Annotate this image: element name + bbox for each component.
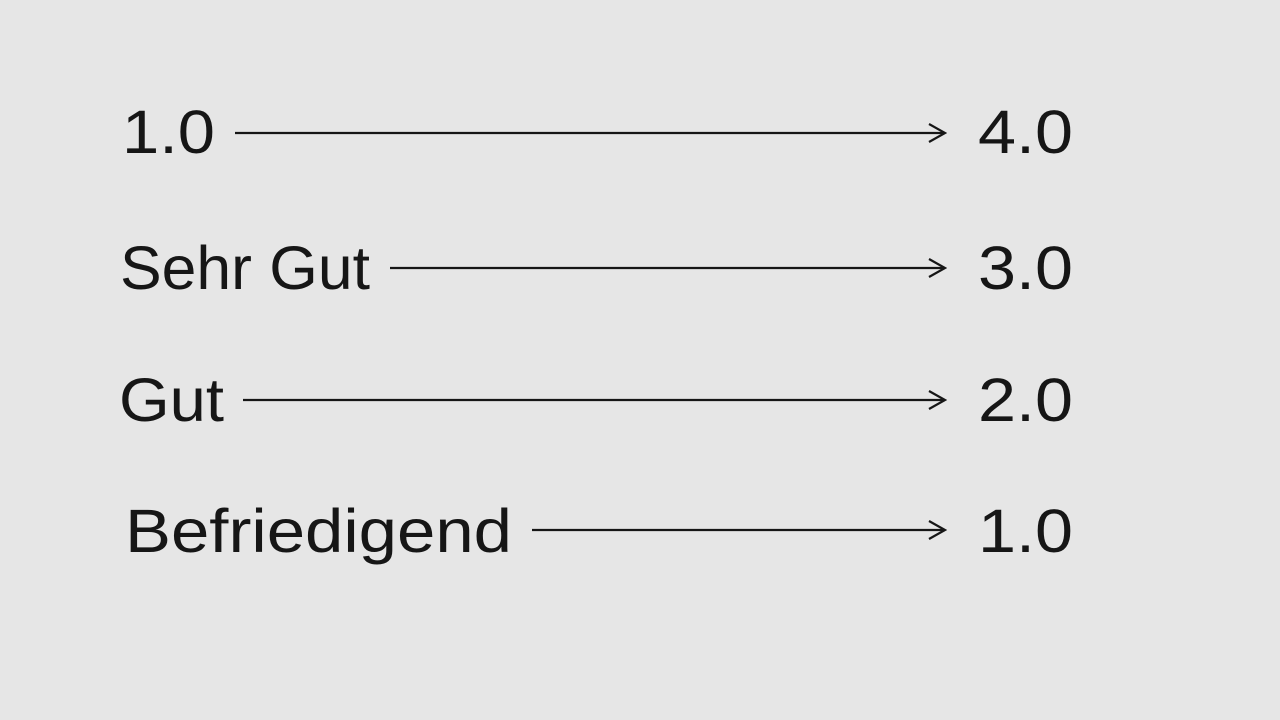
row 1: 1.0 to 4.0: 4.0: [978, 98, 1073, 166]
row 1: 1.0 to 4.0: 1.0: [122, 98, 215, 166]
row 3: Gut to 2.0: [119, 366, 1073, 434]
row 4: Befriedigend to 1.0: 1.0: [978, 497, 1073, 565]
row 4: Befriedigend to 1.0: [125, 497, 1073, 565]
row 3: Gut to 2.0: Gut: [119, 366, 224, 434]
row 3: Gut to 2.0: 2.0: [978, 366, 1073, 434]
row 1: 1.0 to 4.0: [122, 98, 1073, 166]
row 2: Sehr Gut to 3.0: Sehr Gut: [120, 234, 370, 302]
row 4: Befriedigend to 1.0: Befriedigend: [125, 497, 512, 565]
row 2: Sehr Gut to 3.0: 3.0: [978, 234, 1073, 302]
row 2: Sehr Gut to 3.0: [120, 234, 1073, 302]
